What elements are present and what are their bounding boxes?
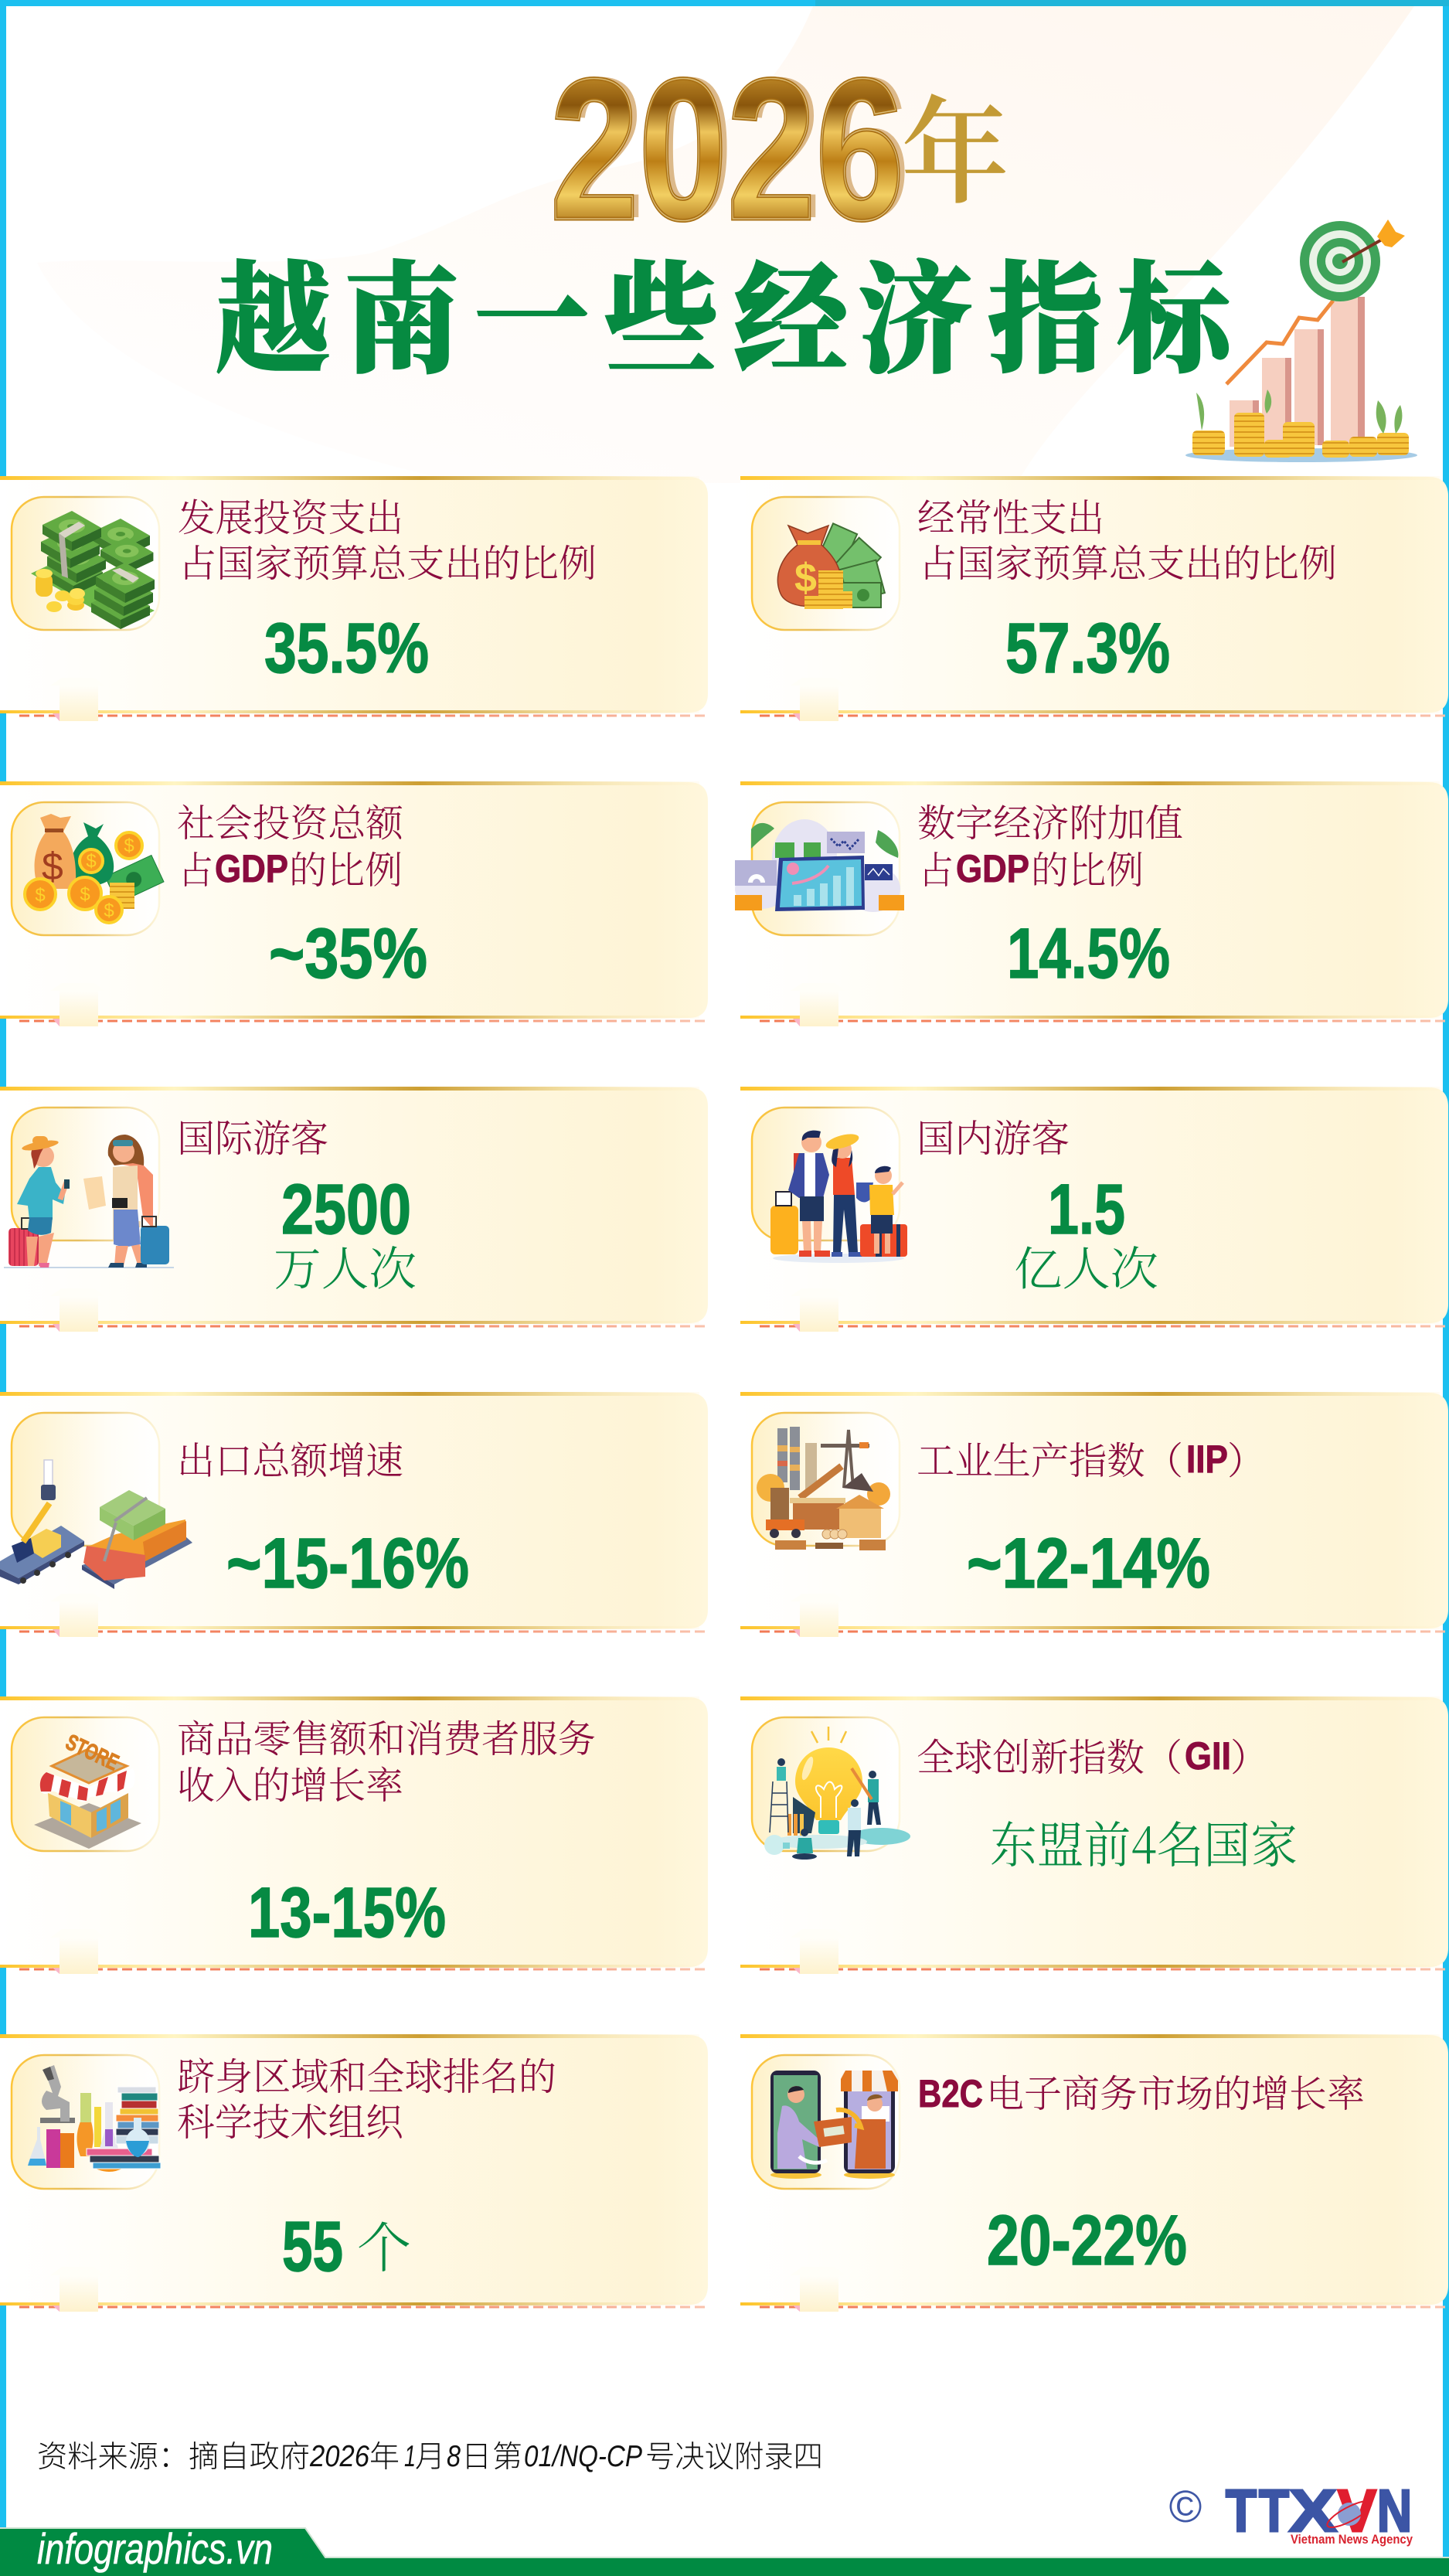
label: ） (1230, 1728, 1268, 1782)
label: IIP (1186, 1438, 1228, 1481)
logo: TTXVN: T (1226, 2478, 1257, 2544)
source note: 月 (415, 2433, 445, 2476)
panel: digital economy (735, 781, 1448, 1026)
label (177, 794, 403, 895)
label: 占 (919, 841, 954, 895)
panel: global innovation index (740, 1696, 1448, 1974)
value: 35.5% (264, 609, 429, 688)
label: 商品零售额和消费者服务 (177, 1710, 596, 1764)
source note: 01/NQ-CP (524, 2440, 642, 2473)
title: year character: 年 (901, 60, 1009, 226)
value: 13-15% (248, 1873, 446, 1952)
icon: family travellers (770, 1131, 907, 1263)
icon: crane and containers (0, 1460, 192, 1589)
label: 国际游客 (177, 1109, 328, 1163)
label: B2C (918, 2072, 983, 2115)
icon: bags and coins: $ (104, 900, 114, 921)
value: ~35% (269, 914, 427, 993)
label: 跻身区域和全球排名的 (177, 2047, 556, 2101)
logo: TTXVN: © (1169, 2482, 1202, 2532)
title: 2026 gold numerals: 2026 (550, 38, 904, 262)
icon: money bag: $ (794, 556, 817, 601)
icon: innovation light bulb (764, 1727, 910, 1860)
panel: domestic tourists (740, 1087, 1448, 1332)
label: 发展投资支出 (178, 488, 403, 543)
source note (37, 2433, 823, 2476)
label: 社会投资总额 (177, 794, 403, 848)
label (177, 1710, 596, 1810)
value: 个 (357, 2205, 411, 2283)
value: 14.5% (1007, 914, 1170, 993)
value: 东盟前4名国家 (990, 1806, 1298, 1877)
unit: 亿人次 (1014, 1233, 1158, 1299)
label (178, 488, 597, 588)
icon: e-commerce phones (770, 2071, 898, 2179)
label: 出口总额增速 (177, 1431, 403, 1485)
source note: 日 (461, 2433, 492, 2476)
label: 的比例 (1031, 841, 1144, 895)
source note: 第 (492, 2433, 522, 2476)
icon: factory (757, 1427, 890, 1550)
logo: TTXVN: X (1289, 2478, 1337, 2544)
panel: industrial production (740, 1392, 1448, 1637)
label: GII (1185, 1734, 1231, 1778)
label (177, 2047, 556, 2147)
label: 占 (179, 841, 213, 895)
source note: 2026 (309, 2440, 369, 2473)
value: ~15-16% (226, 1524, 469, 1603)
logo: TTXVN (1169, 2478, 1413, 2547)
source note: 1 (404, 2440, 416, 2473)
label: 数字经济附加值 (917, 794, 1183, 848)
label: GDP (956, 847, 1029, 890)
label: 占国家预算总支出的比例 (179, 534, 597, 588)
label: 占国家预算总支出的比例 (919, 534, 1337, 588)
title: 2026 gold numerals: 2026 (556, 36, 910, 260)
panel: B2C e-commerce (740, 2034, 1448, 2312)
footer band (0, 2524, 1449, 2576)
panel: export growth (0, 1392, 708, 1637)
panel: development investment (0, 476, 708, 721)
label: 工业生产指数（ (917, 1431, 1183, 1485)
label: 收入的增长率 (177, 1756, 403, 1810)
label: 全球创新指数（ (917, 1728, 1182, 1782)
panel: retail growth (0, 1696, 708, 1974)
icon: money stacks (31, 511, 155, 629)
icon: two travellers (4, 1135, 174, 1268)
icon: lab and books (28, 2065, 161, 2172)
label: 经常性支出 (917, 488, 1104, 543)
source note: 年 (369, 2433, 400, 2476)
icon: money bag (777, 523, 885, 609)
icon: bags and coins: $ (86, 851, 97, 872)
icon: bags and coins: $ (42, 845, 63, 888)
icon: bags and coins: $ (35, 885, 46, 906)
title: 2026 gold numerals: 2026 (550, 38, 904, 262)
value: 1.5 (1048, 1170, 1125, 1249)
logo: TTXVN: N (1377, 2478, 1412, 2544)
value: 20-22% (987, 2201, 1187, 2280)
background cream swoosh (37, 6, 1414, 483)
panel: social investment (0, 781, 708, 1026)
label (917, 488, 1337, 588)
value: 57.3% (1005, 609, 1170, 688)
source note: 号决议附录四 (645, 2433, 823, 2476)
value: ~12-14% (967, 1524, 1210, 1603)
unit: 万人次 (274, 1233, 417, 1299)
icon: bags and coins: $ (80, 884, 90, 905)
icon: growth chart with target (1185, 219, 1417, 462)
icon: store: STORE (62, 1730, 122, 1775)
source note: 8 (447, 2440, 461, 2473)
panel: international tourists (0, 1087, 708, 1332)
label (917, 794, 1183, 895)
logo: TTXVN: V (1338, 2478, 1376, 2544)
label: GDP (215, 847, 288, 890)
panel: science organizations (0, 2034, 708, 2312)
logo: TTXVN: T (1259, 2478, 1289, 2544)
label: 科学技术组织 (177, 2093, 404, 2147)
icon: bags and coins (25, 814, 164, 923)
panel: recurrent expenditure (740, 476, 1448, 721)
title: main heading: 越南一些经济指标 (216, 224, 1242, 396)
label: 电子商务市场的增长率 (986, 2064, 1365, 2118)
label: 国内游客 (917, 1109, 1070, 1163)
value: 2500 (281, 1170, 411, 1249)
source note: 资料来源：摘自政府 (37, 2433, 310, 2476)
value: 55 (282, 2207, 343, 2286)
label: 的比例 (289, 841, 403, 895)
value (282, 2205, 411, 2286)
icon: bags and coins: $ (124, 835, 134, 856)
icon: digital dashboard (735, 819, 904, 912)
icon: store (34, 1730, 141, 1849)
label: ） (1227, 1431, 1265, 1485)
logo: TTXVN: Vietnam News Agency (1291, 2532, 1413, 2547)
footer site name: infographics.vn (37, 2524, 273, 2573)
